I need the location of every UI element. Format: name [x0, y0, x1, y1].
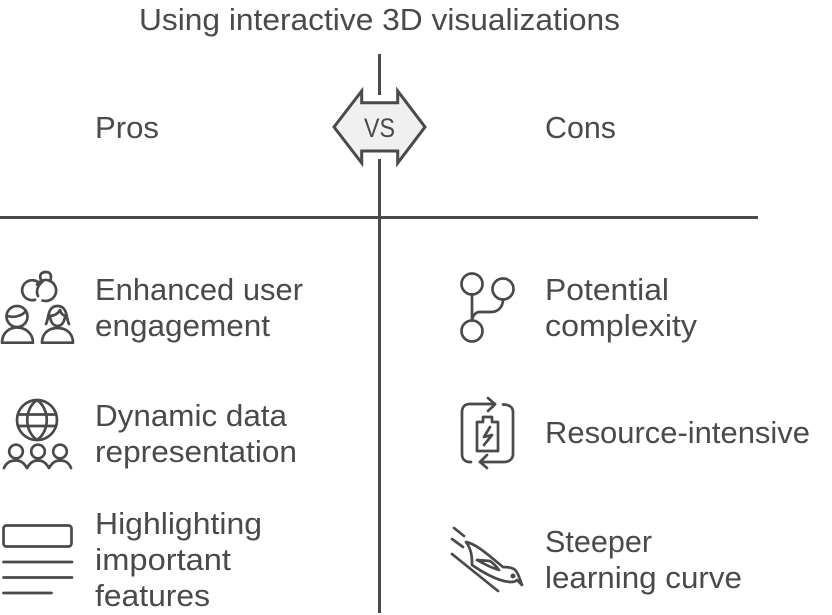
icon: highlighted box and text lines — [4, 526, 72, 593]
title: Using interactive 3D visualizations — [139, 2, 620, 37]
text: enhanced user engagement: Enhanced user — [95, 272, 303, 307]
icon: globe and three people — [4, 400, 71, 468]
heading: cons: Cons — [545, 110, 616, 145]
divider: horizontal axis — [0, 216, 758, 219]
heading: pros: Pros — [95, 110, 159, 145]
text: potential complexity: Potential — [545, 272, 669, 307]
text: enhanced user engagement — [95, 272, 303, 343]
icon: bird sliding down a slope — [452, 528, 522, 591]
divider: vertical axis — [378, 54, 381, 613]
icon: battery with cycle arrows — [462, 398, 513, 468]
text: resource-intensive: Resource-intensive — [545, 415, 810, 450]
vs badge: VS — [364, 113, 395, 143]
text: dynamic data representation: representation — [95, 434, 297, 469]
text: highlighting important features — [95, 506, 262, 613]
text: highlighting important features: Highlighting — [95, 506, 262, 541]
text: steeper learning curve: Steeper — [545, 524, 652, 559]
text: enhanced user engagement: engagement — [95, 308, 270, 343]
text: dynamic data representation — [95, 398, 297, 469]
text: potential complexity — [545, 272, 698, 343]
vs badge — [334, 91, 425, 163]
text: steeper learning curve — [545, 524, 742, 595]
text: highlighting important features: features — [95, 578, 210, 613]
text: steeper learning curve: learning curve — [545, 560, 742, 595]
text: highlighting important features: important — [95, 542, 231, 577]
text: potential complexity: complexity — [545, 308, 698, 343]
icon: branching nodes — [462, 274, 514, 342]
text: dynamic data representation: Dynamic data — [95, 398, 288, 433]
icon: linked rings and two people — [2, 272, 73, 343]
